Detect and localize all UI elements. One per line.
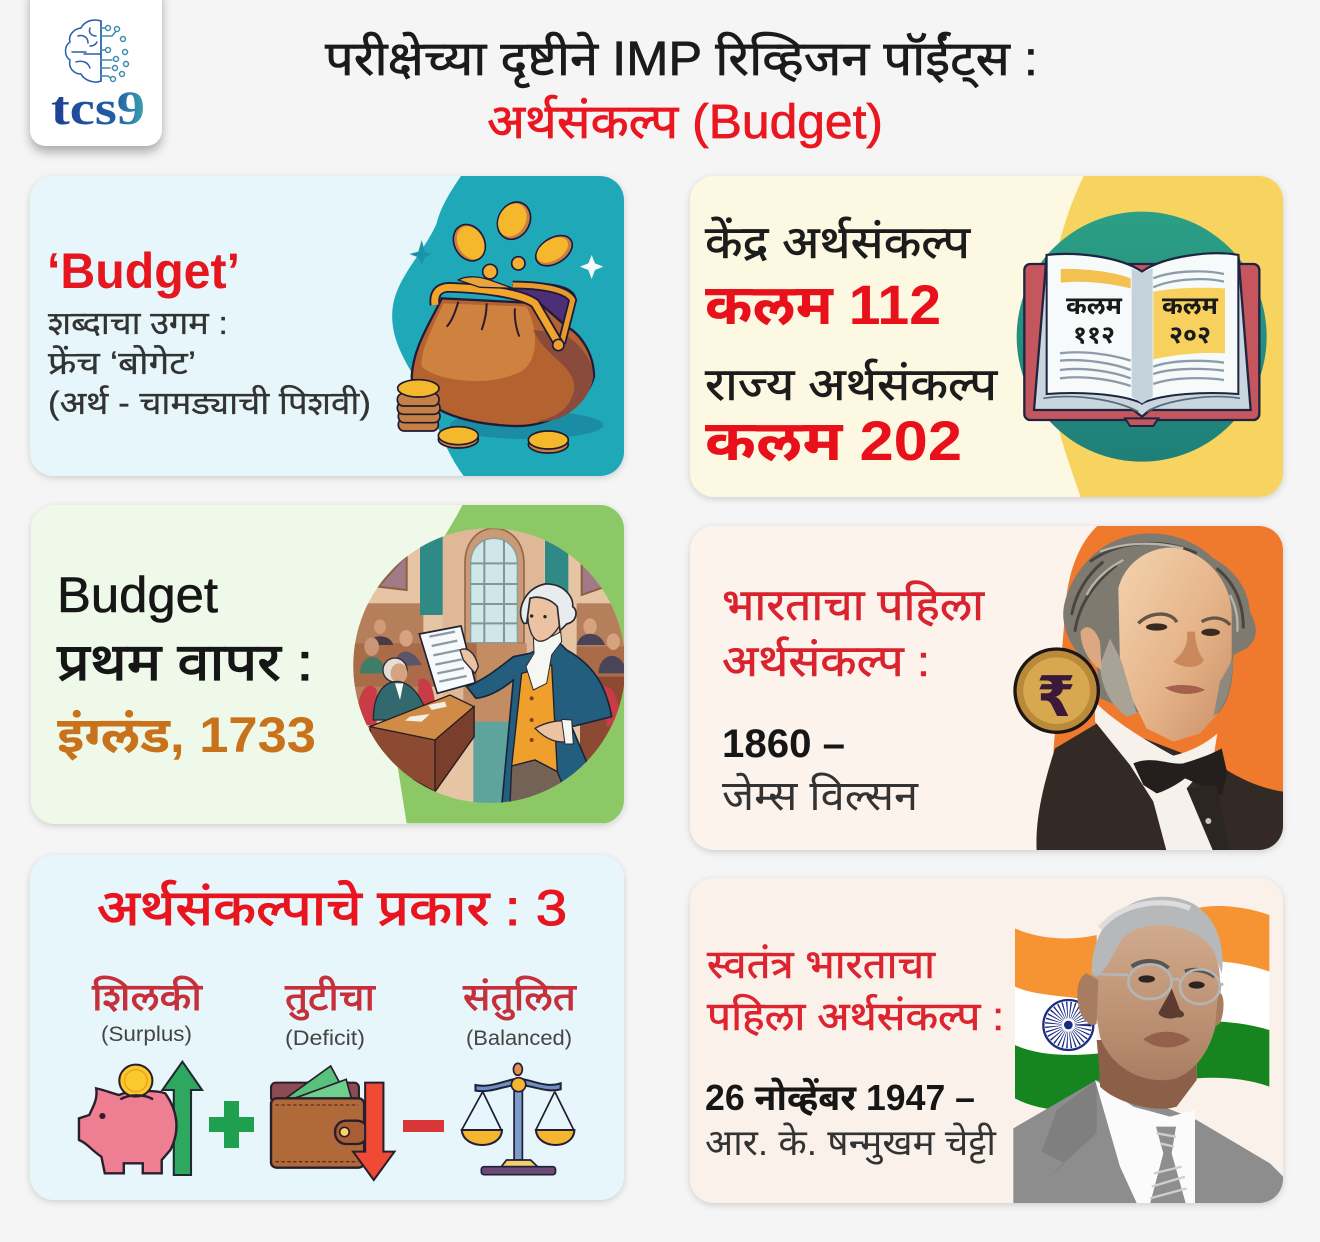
text: date: 26 नोव्हेंबर 1947 – bbox=[705, 1077, 975, 1118]
logo: tcs9 bbox=[30, 0, 162, 146]
text: 1860: 1860 – bbox=[722, 722, 845, 766]
icon: wallet with down arrow bbox=[271, 1066, 394, 1180]
label: surplus: शिलकी bbox=[92, 975, 203, 1019]
text: independent India heading bbox=[707, 943, 1004, 1039]
text: James Wilson: जेम्स विल्सन bbox=[722, 772, 919, 819]
label: surplus: (Surplus) bbox=[101, 1023, 192, 1046]
title line 1: परीक्षेच्या दृष्टीने IMP रिव्हिजन पॉईंट्स : bbox=[325, 31, 1038, 88]
label: balanced bbox=[463, 975, 577, 1050]
text: Budget: Budget bbox=[57, 567, 218, 623]
icon: minus bbox=[403, 1120, 444, 1132]
icon: plus bbox=[209, 1101, 254, 1148]
label: deficit bbox=[285, 975, 376, 1050]
book label: article 202 bbox=[1162, 298, 1218, 344]
title line 2: अर्थसंकल्प (Budget) bbox=[487, 94, 883, 149]
title bbox=[325, 31, 1038, 149]
panel: three budget types bbox=[30, 855, 624, 1200]
text: word origin: (अर्थ - चामड्याची पिशवी) bbox=[48, 385, 371, 421]
book label: article 112: कलम bbox=[1066, 292, 1123, 320]
text: independent India heading: पहिला अर्थसंकल्प : bbox=[707, 994, 1004, 1039]
panel: first budget of independent India bbox=[690, 878, 1287, 1207]
text: independent India heading: स्वतंत्र भारताचा bbox=[707, 943, 936, 987]
heading: Budget: ‘Budget’ bbox=[47, 243, 240, 299]
icon: piggy bank with up arrow bbox=[79, 1062, 202, 1175]
illustration: open book bbox=[1017, 173, 1297, 500]
icon: circuit brain bbox=[66, 20, 128, 82]
text: article 112: कलम 112 bbox=[705, 273, 941, 336]
book label: article 112: ११२ bbox=[1073, 321, 1115, 349]
text: first budget heading: भारताचा पहिला bbox=[722, 580, 986, 630]
book label: article 202: कलम bbox=[1162, 292, 1219, 320]
text: R K Shanmukham Chetty: आर. के. षन्मुखम चेट्टी bbox=[705, 1122, 997, 1165]
illustration: Shanmukham Chetty with flag bbox=[1013, 897, 1287, 1207]
label: balanced: (Balanced) bbox=[466, 1027, 572, 1050]
text: England 1733: इंग्लंड, 1733 bbox=[57, 707, 316, 763]
text: word origin: शब्दाचा उगम : bbox=[48, 305, 228, 341]
text: first budget heading: अर्थसंकल्प : bbox=[722, 636, 930, 686]
panel: first use England bbox=[31, 500, 633, 824]
heading: types of budget: अर्थसंकल्पाचे प्रकार : 3 bbox=[97, 880, 567, 936]
icon: rupee coin: ₹ bbox=[1037, 665, 1075, 730]
text: first budget heading bbox=[722, 580, 986, 686]
book label: article 202: २०२ bbox=[1169, 321, 1211, 349]
panel: constitution articles bbox=[690, 173, 1297, 500]
illustration: coin purse bbox=[392, 175, 633, 480]
icon: balance scale bbox=[462, 1063, 574, 1175]
text: word origin: फ्रेंच ‘बोगेट’ bbox=[48, 345, 196, 381]
panel: first budget of India bbox=[690, 525, 1283, 852]
illustration: James Wilson portrait bbox=[1013, 525, 1283, 852]
label: deficit: तुटीचा bbox=[285, 975, 376, 1020]
book label: article 112 bbox=[1066, 298, 1122, 344]
label: balanced: संतुलित bbox=[463, 975, 577, 1020]
label: surplus bbox=[92, 975, 203, 1046]
label: deficit: (Deficit) bbox=[285, 1027, 365, 1050]
panel: budget word origin bbox=[30, 175, 633, 480]
logo wordmark: tcs9 bbox=[51, 82, 145, 135]
text: article 202: कलम 202 bbox=[705, 409, 962, 472]
text: union budget: केंद्र अर्थसंकल्प bbox=[705, 216, 971, 268]
text: word origin bbox=[48, 305, 371, 421]
text: first use: प्रथम वापर : bbox=[57, 634, 313, 692]
text: state budget: राज्य अर्थसंकल्प bbox=[705, 358, 998, 410]
illustration: parliament scene bbox=[350, 500, 633, 823]
